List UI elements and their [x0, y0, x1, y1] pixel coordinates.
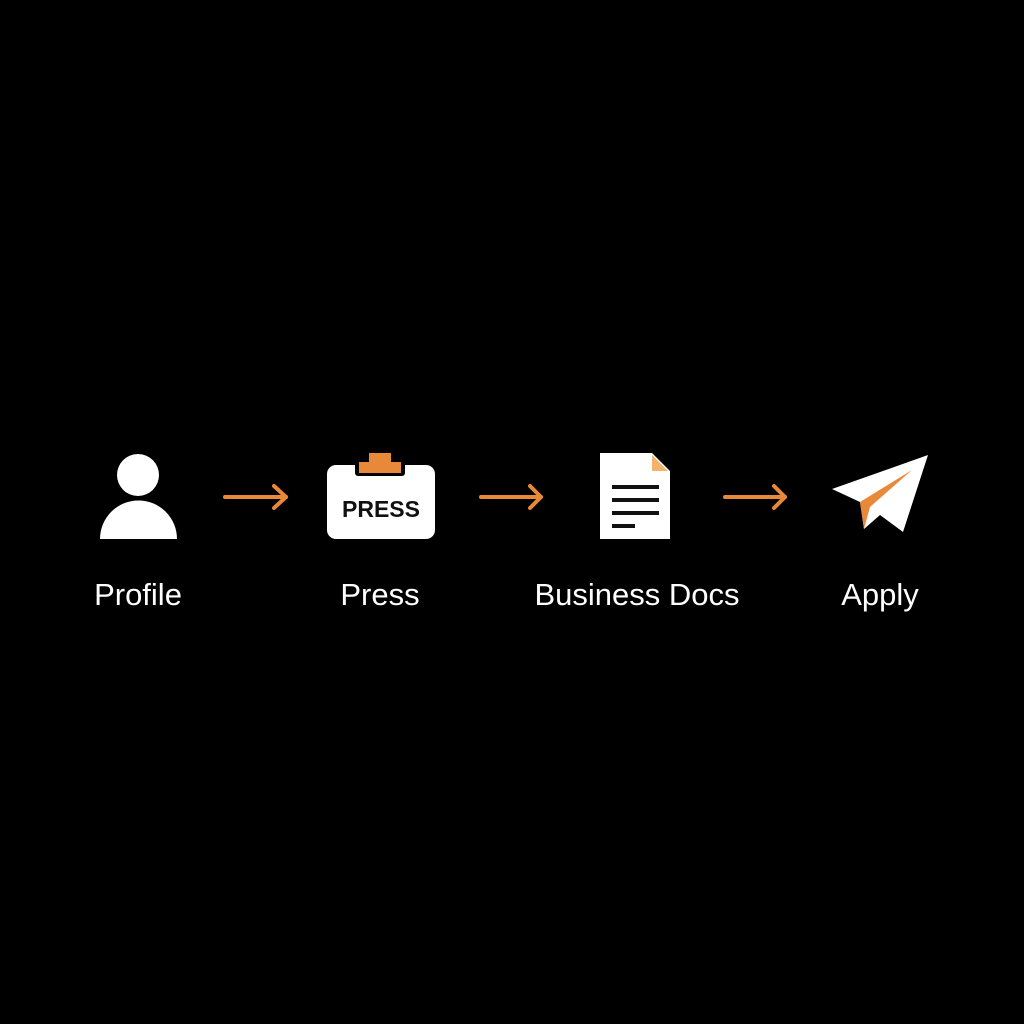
arrow 2 [481, 486, 541, 508]
label: Press: Press [340, 577, 420, 612]
label: Business Docs: Business Docs [534, 577, 740, 612]
label: Profile: Profile [94, 577, 182, 612]
arrow 1 [225, 486, 286, 508]
icon: document [600, 453, 670, 539]
label: Apply: Apply [841, 577, 919, 612]
icon: paper plane [832, 455, 928, 532]
arrow 3 [725, 486, 785, 508]
icon: press badge: PRESS [342, 496, 420, 522]
icon: profile [100, 454, 177, 539]
icon: press badge [327, 453, 435, 539]
